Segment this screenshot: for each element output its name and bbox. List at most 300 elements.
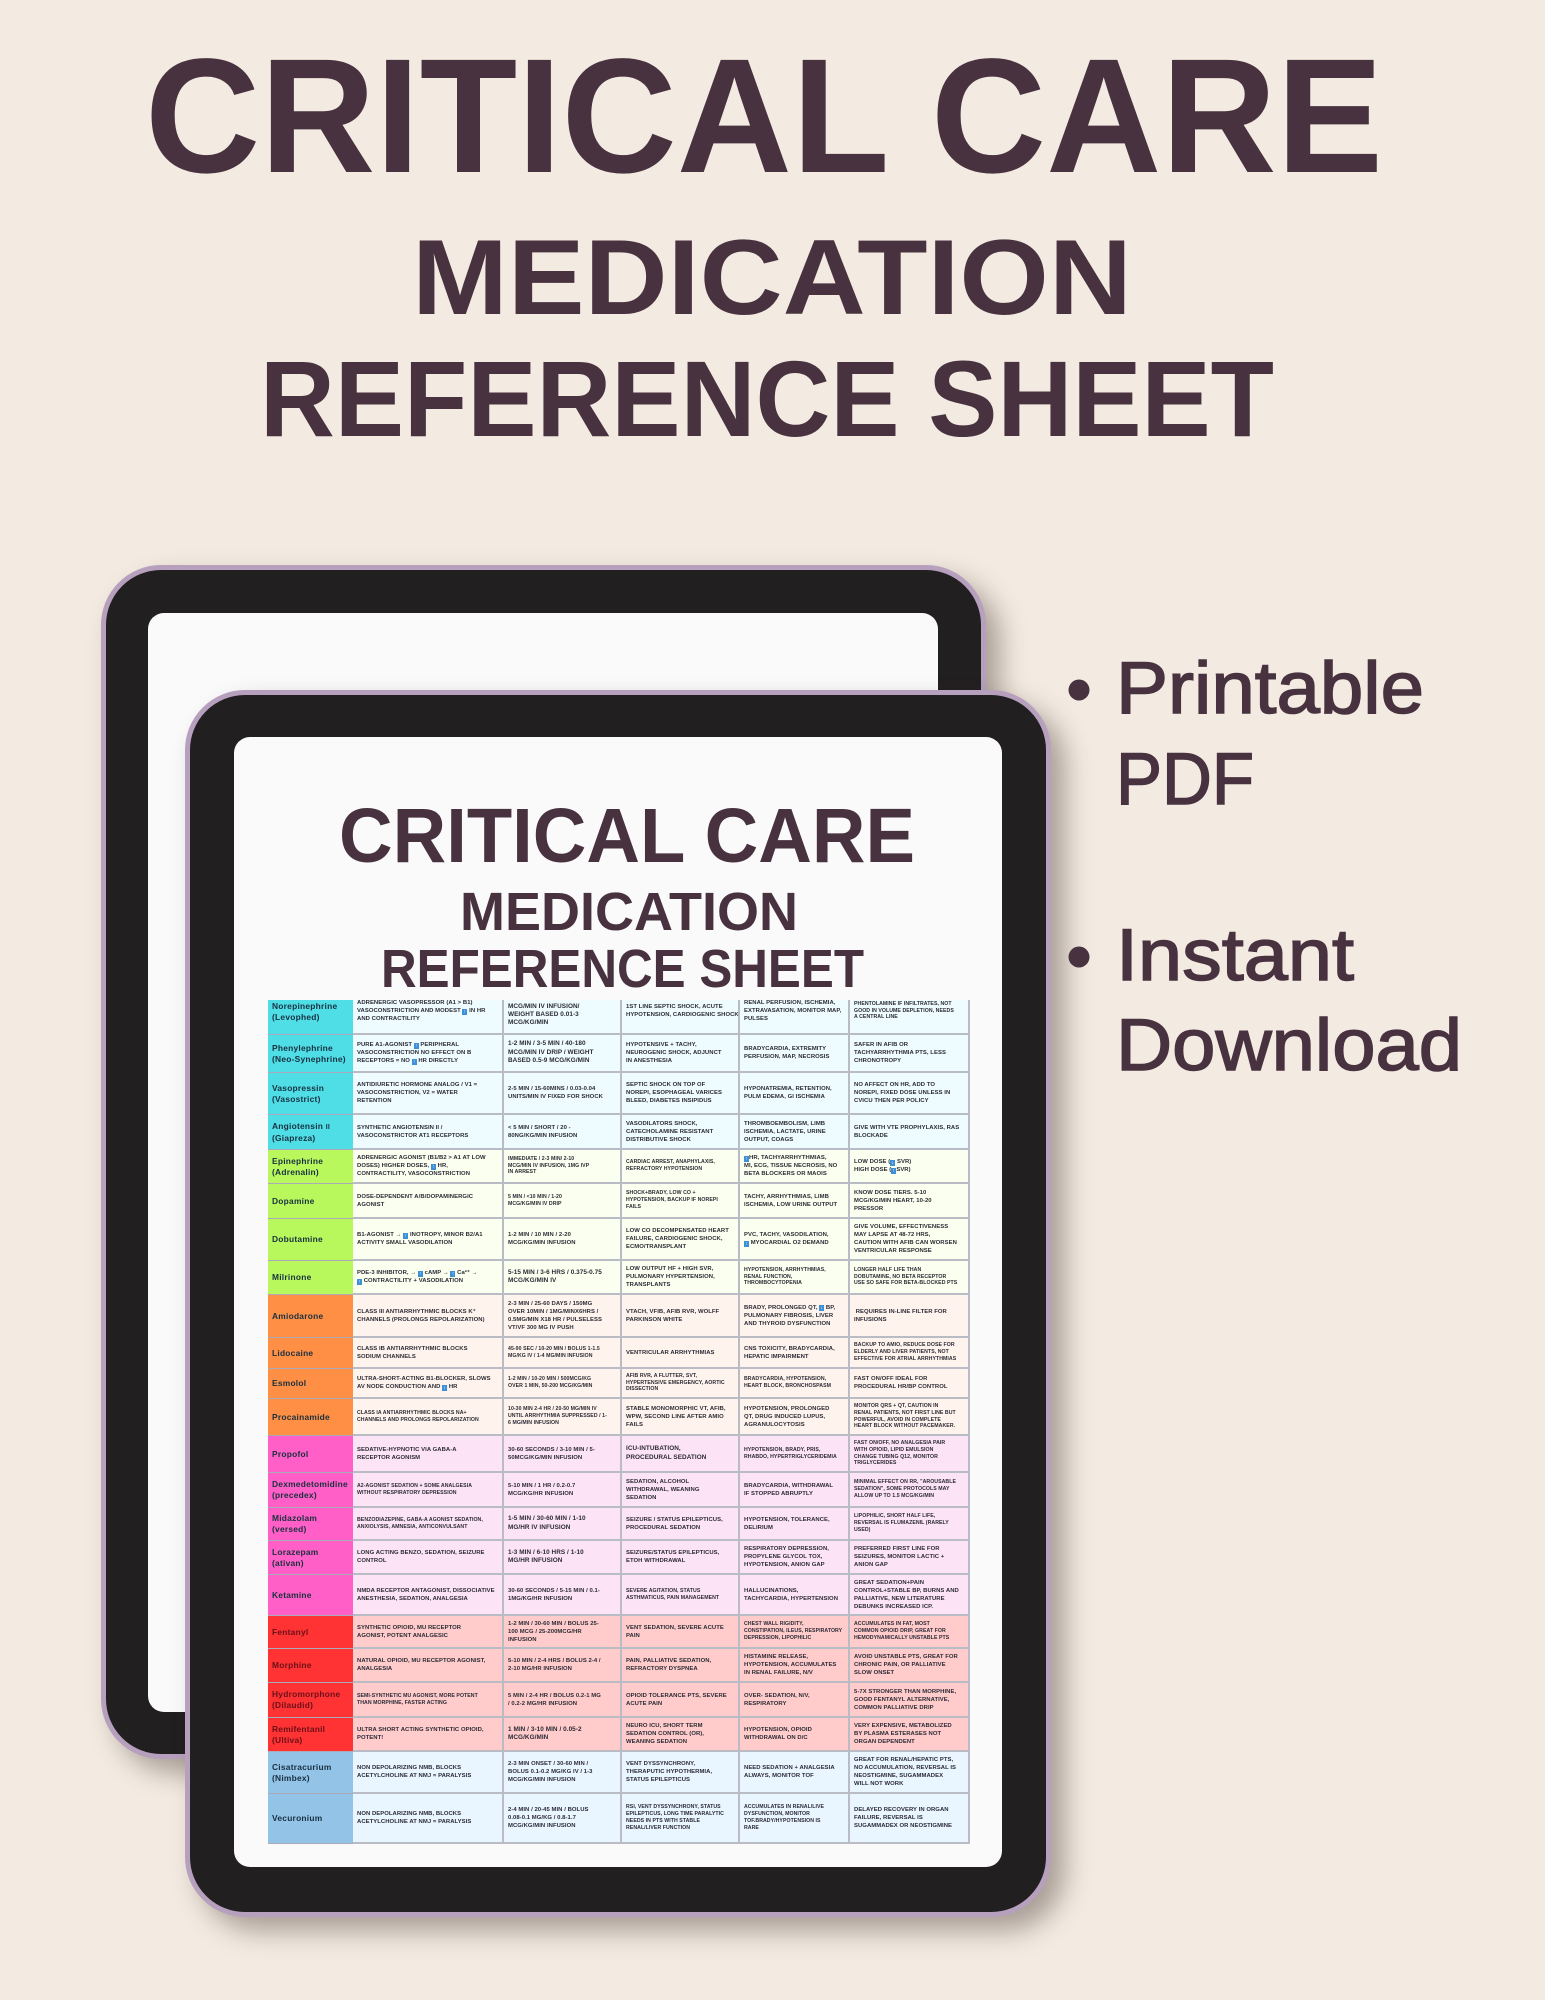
row: Milrinone: MCG/KG/MIN IV bbox=[508, 1277, 556, 1284]
medication table bbox=[268, 1000, 970, 1844]
row: Midazolam: 1-5 MIN / 30-60 MIN / 1-10 bbox=[508, 1515, 586, 1522]
row: Fentanyl: 100 MCG / 25-200MCG/HR bbox=[508, 1628, 582, 1634]
row: Procainamide: 10-30 MIN 2-4 HR / 20-50 MG/MIN IV bbox=[508, 1406, 597, 1412]
row: Midazolam: BENZODIAZEPINE, GABA-A AGONIST SEDATION, bbox=[357, 1517, 483, 1523]
row: Morphine: PAIN, PALLIATIVE SEDATION, bbox=[626, 1658, 711, 1664]
row: Fentanyl: PAIN bbox=[626, 1632, 640, 1638]
row: Epinephrine: CARDIAC ARREST, ANAPHYLAXIS, bbox=[626, 1159, 715, 1165]
row: Remifentanil: WITHDRAWAL ON D/C bbox=[744, 1735, 808, 1741]
row: Angiotensin II bbox=[268, 1115, 970, 1150]
row: Remifentanil: (Ultiva) bbox=[272, 1734, 302, 1744]
row: Vecuronium: FAILURE, REVERSAL IS bbox=[854, 1815, 923, 1821]
row: Procainamide: QT, DRUG INDUCED LUPUS, bbox=[744, 1414, 825, 1420]
row: Esmolol: FAST ON/OFF IDEAL FOR bbox=[854, 1376, 927, 1382]
row: Vasopressin: NOREPI, ESOPHAGEAL VARICES bbox=[626, 1090, 722, 1096]
row: Propofol: TRIGLYCERIDES bbox=[854, 1460, 896, 1466]
row: Dopamine: AGONIST bbox=[357, 1202, 384, 1208]
row: Lorazepam: ETOH WITHDRAWAL bbox=[626, 1558, 685, 1564]
row: Fentanyl: AGONIST, POTENT ANALGESIC bbox=[357, 1632, 448, 1638]
row: Procainamide: AGRANULOCYTOSIS bbox=[744, 1422, 805, 1428]
row: Epinephrine: ↑ bbox=[893, 1168, 895, 1174]
row: Phenylephrine: MCG/MIN IV DRIP / WEIGHT bbox=[508, 1049, 593, 1056]
row: Angiotensin II: OUTPUT, COAGS bbox=[744, 1136, 793, 1142]
row: Phenylephrine: SAFER IN AFIB OR bbox=[854, 1042, 908, 1048]
row: Dopamine: MCG/KG/MIN IV DRIP bbox=[508, 1200, 562, 1206]
row: Ketamine bbox=[268, 1575, 970, 1616]
row: Procainamide: HEART BLOCK WITHOUT PACEMAKER. bbox=[854, 1423, 955, 1429]
row: Procainamide: RENAL PATIENTS, NOT FIRST LINE BUT bbox=[854, 1410, 956, 1416]
row: Phenylephrine: ↑ bbox=[413, 1058, 415, 1064]
row: Dopamine: 5 MIN / <10 MIN / 1-20 bbox=[508, 1194, 562, 1200]
row: Esmolol: AFIB RVR, A FLUTTER, SVT, bbox=[626, 1373, 697, 1379]
row: Vasopressin: 2-5 MIN / 15-60MINS / 0.03-0.04 bbox=[508, 1086, 595, 1092]
row: Dopamine: FAILS bbox=[626, 1204, 641, 1210]
row: Lidocaine: EFFECTIVE FOR ATRIAL ARRHYTHMIAS bbox=[854, 1356, 956, 1362]
row: Dobutamine: Dobutamine bbox=[272, 1234, 323, 1244]
row: Vasopressin: SEPTIC SHOCK ON TOP OF bbox=[626, 1082, 705, 1088]
row: Milrinone: DOBUTAMINE, NO BETA RECEPTOR bbox=[854, 1274, 946, 1280]
row: Lorazepam bbox=[268, 1541, 970, 1575]
row: Esmolol: BRADYCARDIA, HYPOTENSION, bbox=[744, 1376, 826, 1382]
row: Vasopressin: UNITS/MIN IV FIXED FOR SHOCK bbox=[508, 1094, 603, 1100]
sheet heading: Critical Care: CRITICAL CARE bbox=[339, 793, 915, 879]
heading: Medication: MEDICATION bbox=[412, 217, 1132, 337]
row: Dopamine: DOSE-DEPENDENT A/B/DOPAMINERGIC bbox=[357, 1194, 473, 1200]
row: Midazolam: USED) bbox=[854, 1527, 870, 1533]
row: Remifentanil: VERY EXPENSIVE, METABOLIZED bbox=[854, 1723, 952, 1729]
row: Dexmedetomidine: WITHDRAWAL, WEANING bbox=[626, 1486, 699, 1492]
row: Dobutamine: ECMO/TRANSPLANT bbox=[626, 1244, 686, 1250]
row: Cisatracurium: BOLUS 0.1-0.2 MG/KG IV / 1-3 bbox=[508, 1769, 592, 1775]
row: Dopamine: PRESSOR bbox=[854, 1206, 883, 1212]
row: Milrinone: 5-15 MIN / 3-6 HRS / 0.375-0.75 bbox=[508, 1269, 602, 1276]
row: Phenylephrine: 1-2 MIN / 3-5 MIN / 40-180 bbox=[508, 1040, 586, 1047]
row: Amiodarone: REQUIRES IN-LINE FILTER FOR bbox=[856, 1308, 947, 1314]
row: Epinephrine: ADRENERGIC AGONIST (B1/B2 > A1 AT LOW bbox=[357, 1155, 486, 1161]
row: Midazolam: SEIZURE / STATUS EPILEPTICUS, bbox=[626, 1516, 723, 1522]
row: Dopamine: MCG/KG/MIN HEART, 10-20 bbox=[854, 1198, 932, 1204]
row: Ketamine: SEVERE AGITATION, STATUS bbox=[626, 1588, 700, 1594]
row: Midazolam: Midazolam bbox=[272, 1513, 317, 1523]
row: Angiotensin II: SYNTHETIC ANGIOTENSIN II / bbox=[357, 1124, 442, 1130]
row: Vasopressin: NOREPI, FIXED DOSE UNLESS IN bbox=[854, 1090, 950, 1096]
row: Propofol bbox=[268, 1436, 970, 1473]
row: Esmolol: DISSECTION bbox=[626, 1386, 658, 1392]
row: Cisatracurium: THERAPUTIC HYPOTHERMIA, bbox=[626, 1769, 712, 1775]
row: Vecuronium: DELAYED RECOVERY IN ORGAN bbox=[854, 1807, 949, 1813]
row: Angiotensin II: CATECHOLAMINE RESISTANT bbox=[626, 1128, 713, 1134]
row: Midazolam: (versed) bbox=[272, 1524, 307, 1534]
row: Epinephrine bbox=[268, 1150, 970, 1184]
row: Vecuronium: NON DEPOLARIZING NMB, BLOCKS bbox=[357, 1811, 461, 1817]
row: Fentanyl: DEPRESSION, LIPOPHILIC bbox=[744, 1635, 811, 1641]
row: Vasopressin: Vasopressin bbox=[272, 1082, 324, 1092]
row: Angiotensin II: (Giapreza) bbox=[272, 1132, 315, 1142]
row: Remifentanil: WEANING SEDATION bbox=[626, 1739, 687, 1745]
row: Hydromorphone: / 0.2-2 MG/HR INFUSION bbox=[508, 1700, 577, 1706]
row: Morphine: HISTAMINE RELEASE, bbox=[744, 1654, 808, 1660]
row: Lidocaine: CNS TOXICITY, BRADYCARDIA, bbox=[744, 1346, 835, 1352]
row: Norepinephrine: GOOD IN VOLUME DEPLETION, NEEDS bbox=[854, 1008, 954, 1014]
row: Norepinephrine: (Levophed) bbox=[272, 1012, 320, 1022]
row: Fentanyl: VENT SEDATION, SEVERE ACUTE bbox=[626, 1624, 724, 1630]
row: Dobutamine: PVC, TACHY, VASODILATION, bbox=[744, 1232, 829, 1238]
row: Lorazepam: CONTROL bbox=[357, 1558, 387, 1564]
row: Epinephrine: IMMEDIATE / 2-3 MIN/ 2-10 bbox=[508, 1156, 574, 1162]
row: Vasopressin: NO AFFECT ON HR, ADD TO bbox=[854, 1082, 935, 1088]
row: Propofol: HYPOTENSION, BRADY, PRIS, bbox=[744, 1447, 820, 1453]
row: Norepinephrine: EXTRAVASATION, MONITOR MAP, bbox=[744, 1008, 841, 1014]
row: Angiotensin II: BLOCKADE bbox=[854, 1132, 888, 1138]
row: Remifentanil: NEURO ICU, SHORT TERM bbox=[626, 1723, 703, 1729]
row: Amiodarone bbox=[268, 1295, 970, 1338]
row: Amiodarone: OVER 10MIN / 1MG/MINX6HRS / bbox=[508, 1308, 598, 1314]
row: Amiodarone: CHANNELS (PROLONGS REPOLARIZATION) bbox=[357, 1316, 485, 1322]
row: Amiodarone: PULMONARY FIBROSIS, LIVER bbox=[744, 1312, 833, 1318]
back tablet screen bbox=[148, 613, 938, 1712]
row: Dobutamine: MYOCARDIAL O2 DEMAND bbox=[751, 1240, 829, 1246]
row: Epinephrine: HIGH DOSE ( SVR) bbox=[854, 1167, 911, 1173]
row: Vasopressin: (Vasostrict) bbox=[272, 1094, 321, 1104]
row: Lorazepam: Lorazepam bbox=[272, 1546, 318, 1556]
row: Vecuronium: DYSFUNCTION, MONITOR bbox=[744, 1811, 810, 1817]
row: Dexmedetomidine: MINIMAL EFFECT ON RR, "AROUSABLE bbox=[854, 1479, 956, 1485]
row: Cisatracurium: VENT DYSSYNCHRONY, bbox=[626, 1761, 695, 1767]
row: Dexmedetomidine: SEDATION, ALCOHOL bbox=[626, 1478, 689, 1484]
row: Procainamide bbox=[268, 1399, 970, 1436]
row: Midazolam: ANXIOLYSIS, AMNESIA, ANTICONVULSANT bbox=[357, 1524, 467, 1530]
row: Fentanyl: HEMODYNAMICALLY UNSTABLE PTS bbox=[854, 1635, 949, 1641]
bullet: Printable PDF: PDF bbox=[1116, 739, 1254, 820]
row: Dobutamine bbox=[268, 1219, 970, 1261]
bullet: Instant Download: Download bbox=[1116, 1005, 1462, 1086]
row: Esmolol bbox=[268, 1369, 970, 1399]
row: Angiotensin II: THROMBOEMBOLISM, LIMB bbox=[744, 1120, 825, 1126]
row: Lidocaine: CLASS IB ANTIARRHYTHMIC BLOCKS bbox=[357, 1346, 468, 1352]
row: Dobutamine: ↑ bbox=[404, 1232, 407, 1238]
row: Phenylephrine: BRADYCARDIA, EXTREMITY bbox=[744, 1046, 826, 1052]
row: Cisatracurium: GREAT FOR RENAL/HEPATIC PTS, bbox=[854, 1757, 953, 1763]
row: Dobutamine: B1-AGONIST → INOTROPY, MINOR B2/A1 bbox=[357, 1232, 483, 1238]
row: Dexmedetomidine: Dexmedetomidine bbox=[272, 1479, 348, 1489]
row: Norepinephrine: VASOCONSTRICTION AND MODEST IN HR bbox=[357, 1008, 485, 1014]
row: Morphine: NATURAL OPIOID, MU RECEPTOR AGONIST, bbox=[357, 1658, 485, 1664]
row: Vecuronium: ACETYLCHOLINE AT NMJ = PARALYSIS bbox=[357, 1819, 471, 1825]
row: Vecuronium: EPILEPTICUS, LONG TIME PARALYTIC bbox=[626, 1811, 724, 1817]
heading: Critical Care: CRITICAL CARE bbox=[145, 24, 1383, 207]
row: Milrinone: THROMBOCYTOPENIA bbox=[744, 1280, 802, 1286]
row: Milrinone bbox=[268, 1261, 970, 1295]
row: Vecuronium: NEEDS IN PTS WITH STABLE bbox=[626, 1818, 700, 1824]
row: Cisatracurium: NEED SEDATION + ANALGESIA bbox=[744, 1765, 835, 1771]
row: Lidocaine: 45-90 SEC / 10-20 MIN / BOLUS 1-1.5 bbox=[508, 1346, 600, 1352]
row: Cisatracurium: STATUS EPILEPTICUS bbox=[626, 1777, 690, 1783]
row: Amiodarone: BRADY, PROLONGED QT, BP, bbox=[744, 1304, 835, 1310]
row: Milrinone: CONTRACTILITY + VASODILATION bbox=[364, 1278, 463, 1284]
row: Propofol: FAST ON/OFF, NO ANALGESIA PAIR bbox=[854, 1440, 945, 1446]
row: Amiodarone: INFUSIONS bbox=[854, 1316, 887, 1322]
row: Epinephrine: ↑ bbox=[745, 1156, 748, 1162]
row: Lorazepam: PROPYLENE GLYCOL TOX, bbox=[744, 1554, 822, 1560]
row: Lidocaine bbox=[268, 1338, 970, 1369]
row: Esmolol: OVER 1 MIN, 50-200 MCG/KG/MIN bbox=[508, 1383, 592, 1389]
row: Dopamine: SHOCK+BRADY, LOW CO + bbox=[626, 1190, 696, 1196]
row: Phenylephrine: HYPOTENSIVE + TACHY, bbox=[626, 1042, 697, 1048]
row: Dexmedetomidine: WITHOUT RESPIRATORY DEPRESSION bbox=[357, 1490, 457, 1496]
heading: Reference Sheet: REFERENCE SHEET bbox=[260, 338, 1274, 459]
row: Vecuronium: Vecuronium bbox=[272, 1813, 322, 1823]
row: Vecuronium: RSI, VENT DYSSYNCHRONY, STATUS bbox=[626, 1804, 721, 1810]
row: Procainamide: FAILS bbox=[626, 1422, 643, 1428]
row: Propofol: WITH OPIOID, LIPID EMULSION bbox=[854, 1447, 933, 1453]
row: Cisatracurium bbox=[268, 1752, 970, 1794]
row: Esmolol: AV NODE CONDUCTION AND HR bbox=[357, 1384, 458, 1390]
row: Dobutamine: VENTRICULAR RESPONSE bbox=[854, 1248, 932, 1254]
row: Lorazepam: 1-3 MIN / 6-10 HRS / 1-10 bbox=[508, 1549, 584, 1556]
row: Epinephrine: MCG/MIN IV INFUSION, 1MG IVP bbox=[508, 1163, 589, 1169]
row: Dopamine: ISCHEMIA, LOW URINE OUTPUT bbox=[744, 1202, 837, 1208]
row: Lidocaine: BACKUP TO AMIO, REDUCE DOSE FOR bbox=[854, 1342, 955, 1348]
row: Amiodarone: Amiodarone bbox=[272, 1310, 323, 1320]
row: Fentanyl bbox=[268, 1616, 970, 1649]
row: Remifentanil: BY PLASMA ESTERASES NOT bbox=[854, 1731, 941, 1737]
row: Dobutamine: FAILURE, CARDIOGENIC SHOCK, bbox=[626, 1236, 723, 1242]
row: Phenylephrine: TACHYARRHYTHMIA PTS, LESS bbox=[854, 1050, 946, 1056]
row: Propofol: RHABDO, HYPERTRIGLYCERIDEMIA bbox=[744, 1454, 837, 1460]
row: Hydromorphone: OVER- SEDATION, N/V, bbox=[744, 1692, 810, 1698]
row: Fentanyl: CHEST WALL RIGIDITY, bbox=[744, 1621, 804, 1627]
row: Epinephrine: Epinephrine bbox=[272, 1156, 323, 1166]
row: Milrinone: ↑ bbox=[452, 1270, 454, 1276]
row: Morphine: CHRONIC PAIN, OR PALLIATIVE bbox=[854, 1662, 946, 1668]
row: Vasopressin: CVICU THEN PER POLICY bbox=[854, 1098, 929, 1104]
row: Procainamide: CLASS IA ANTIARRHYTHMIC BLOCKS NA+ bbox=[357, 1410, 467, 1416]
row: Epinephrine: ↓ bbox=[892, 1160, 894, 1166]
row: Milrinone: Milrinone bbox=[272, 1272, 311, 1282]
row: Norepinephrine bbox=[268, 1000, 970, 1844]
row: Epinephrine: LOW DOSE ( SVR) bbox=[854, 1159, 911, 1165]
row: Morphine: SLOW ONSET bbox=[854, 1670, 894, 1676]
row: Phenylephrine bbox=[268, 1035, 970, 1073]
row: Morphine bbox=[268, 1649, 970, 1683]
row: Dexmedetomidine: SEDATION", SOME PROTOCOLS MAY bbox=[854, 1486, 949, 1492]
row: Norepinephrine: Norepinephrine bbox=[272, 1000, 337, 1010]
row: Norepinephrine: A CENTRAL LINE bbox=[854, 1014, 898, 1020]
row: Vecuronium: MCG/KG/MIN INFUSION bbox=[508, 1823, 576, 1829]
row: Milrinone: PULMONARY HYPERTENSION, bbox=[626, 1274, 715, 1280]
row: Angiotensin II: VASOCONSTRICTOR AT1 RECEPTORS bbox=[357, 1132, 468, 1138]
row: Procainamide: STABLE MONOMORPHIC VT, AFIB, bbox=[626, 1406, 726, 1412]
row: Vecuronium: SUGAMMADEX OR NEOSTIGMINE bbox=[854, 1823, 952, 1829]
row: Angiotensin II: ISCHEMIA, LACTATE, URINE bbox=[744, 1128, 826, 1134]
row: Esmolol: ULTRA-SHORT-ACTING B1-BLOCKER, SLOWS bbox=[357, 1376, 491, 1382]
row: Amiodarone: VT/VF 300 MG IV PUSH bbox=[508, 1324, 574, 1330]
row: Epinephrine: ↑ bbox=[432, 1164, 435, 1170]
row: Milrinone: USE SO SAFE FOR BETA-BLOCKED PTS bbox=[854, 1280, 957, 1286]
row: Dobutamine: GIVE VOLUME, EFFECTIVENESS bbox=[854, 1224, 948, 1230]
row: Dobutamine: LOW CO DECOMPENSATED HEART bbox=[626, 1228, 729, 1234]
row: Milrinone: HYPOTENSION, ARRHYTHMIAS, bbox=[744, 1267, 826, 1273]
row: Vecuronium: ACCUMULATES IN RENAL/LIVE bbox=[744, 1804, 824, 1810]
row: Norepinephrine: HYPOTENSION, CARDIOGENIC SHOCK bbox=[626, 1012, 739, 1018]
row: Esmolol: 1-2 MIN / 10-20 MIN / 500MCG/KG bbox=[508, 1376, 591, 1382]
row: Hydromorphone: COMMON PALLIATIVE DRIP bbox=[854, 1704, 934, 1710]
row: Procainamide: Procainamide bbox=[272, 1412, 330, 1422]
row: Propofol: RECEPTOR AGONISM bbox=[357, 1454, 420, 1460]
row: Milrinone: ↑ bbox=[358, 1278, 361, 1284]
row: Angiotensin II: DISTRIBUTIVE SHOCK bbox=[626, 1136, 691, 1142]
row: Lidocaine: VENTRICULAR ARRHYTHMIAS bbox=[626, 1350, 715, 1356]
row: Dobutamine: CAUTION WITH AFIB CAN WORSEN bbox=[854, 1240, 957, 1246]
row: Phenylephrine: ↑ bbox=[415, 1042, 418, 1048]
row: Cisatracurium: NO ACCUMULATION, REVERSAL IS bbox=[854, 1765, 956, 1771]
row: Remifentanil: 1 MIN / 3-10 MIN / 0.05-2 bbox=[508, 1726, 582, 1733]
row: Vasopressin: BLEED, DIABETES INSIPIDUS bbox=[626, 1098, 712, 1104]
row: Fentanyl: SYNTHETIC OPIOID, MU RECEPTOR bbox=[357, 1624, 461, 1630]
row: Lidocaine: Lidocaine bbox=[272, 1348, 313, 1358]
row: Cisatracurium: (Nimbex) bbox=[272, 1772, 310, 1782]
row: Ketamine: PALLIATIVE, NEW LITERATURE bbox=[854, 1596, 945, 1602]
row: Vasopressin: PULM EDEMA, GI ISCHEMIA bbox=[744, 1094, 825, 1100]
row: Amiodarone: VTACH, VFIB, AFIB RVR, WOLFF bbox=[626, 1308, 719, 1314]
row: Lorazepam: SEIZURES, MONITOR LACTIC + bbox=[854, 1554, 944, 1560]
row: Propofol: SEDATIVE-HYPNOTIC VIA GABA-A bbox=[357, 1446, 457, 1452]
row: Dopamine: KNOW DOSE TIERS. 5-10 bbox=[854, 1190, 926, 1196]
row: Ketamine: ASTHMATICUS, PAIN MANAGEMENT bbox=[626, 1594, 719, 1600]
row: Dobutamine: ↑ bbox=[745, 1240, 748, 1246]
row: Amiodarone: 2-3 MIN / 25-60 DAYS / 150MG bbox=[508, 1300, 592, 1306]
row: Dexmedetomidine: (precedex) bbox=[272, 1490, 317, 1500]
row: Fentanyl: COMMON OPIOID DRIP, GREAT FOR bbox=[854, 1628, 946, 1634]
row: Milrinone: RENAL FUNCTION, bbox=[744, 1274, 792, 1280]
row: Dobutamine: MCG/KG/MIN INFUSION bbox=[508, 1240, 576, 1246]
row: Dobutamine: 1-2 MIN / 10 MIN / 2-20 bbox=[508, 1232, 571, 1238]
row: Remifentanil: ORGAN DEPENDENT bbox=[854, 1739, 915, 1745]
row: Amiodarone: AND THYROID DYSFUNCTION bbox=[744, 1320, 830, 1326]
row: Angiotensin II: GIVE WITH VTE PROPHYLAXIS, RAS bbox=[854, 1124, 959, 1130]
row: Propofol: PROCEDURAL SEDATION bbox=[626, 1454, 706, 1460]
row: Ketamine: DEBUNKS INCREASED ICP. bbox=[854, 1604, 933, 1610]
row: Amiodarone: PARKINSON WHITE bbox=[626, 1316, 682, 1322]
row: Milrinone: TRANSPLANTS bbox=[626, 1282, 671, 1288]
front tablet screen bbox=[234, 737, 1002, 1867]
row: Lidocaine: MG/KG IV / 1-4 MG/MIN INFUSION bbox=[508, 1352, 593, 1358]
row: Lorazepam: ANION GAP bbox=[854, 1562, 888, 1568]
row: Esmolol: PROCEDURAL HR/BP CONTROL bbox=[854, 1384, 948, 1390]
row: Propofol: Propofol bbox=[272, 1448, 308, 1458]
row: Procainamide: 6 MG/MIN INFUSION bbox=[508, 1420, 559, 1426]
row: Milrinone: LOW OUTPUT HF + HIGH SVR, bbox=[626, 1266, 713, 1272]
row: Phenylephrine: PURE A1-AGONIST PERIPHERAL bbox=[357, 1042, 459, 1048]
front tablet bbox=[185, 690, 1051, 1917]
row: Midazolam: MG/HR IV INFUSION bbox=[508, 1524, 570, 1530]
row: Remifentanil bbox=[268, 1718, 970, 1752]
row: Milrinone: PDE-3 INHIBITOR, → cAMP → Ca²⁺ → bbox=[357, 1270, 478, 1276]
row: Hydromorphone: Hydromorphone bbox=[272, 1689, 340, 1699]
row: Phenylephrine: IN ANESTHESIA bbox=[626, 1058, 672, 1064]
row: Dopamine bbox=[268, 1184, 970, 1219]
row: Hydromorphone: 5 MIN / 2-4 HR / BOLUS 0.2-1 MG bbox=[508, 1692, 601, 1698]
row: Epinephrine: MI, ECG, TISSUE NECROSIS, NO bbox=[744, 1163, 837, 1169]
row: Fentanyl: ACCUMULATES IN FAT, MOST bbox=[854, 1621, 930, 1627]
row: Remifentanil: SEDATION CONTROL (OR), bbox=[626, 1731, 704, 1737]
row: Vasopressin: HYPONATREMIA, RETENTION, bbox=[744, 1086, 832, 1092]
row: Norepinephrine: 1ST LINE SEPTIC SHOCK, ACUTE bbox=[626, 1004, 723, 1010]
bullet: Printable PDF bbox=[1068, 648, 1424, 820]
row: Morphine: AVOID UNSTABLE PTS, GREAT FOR bbox=[854, 1654, 958, 1660]
row: Dexmedetomidine: MCG/KG/HR INFUSION bbox=[508, 1490, 573, 1496]
row: Phenylephrine: PERFUSION, MAP, NECROSIS bbox=[744, 1054, 829, 1060]
row: Propofol: ICU-INTUBATION, bbox=[626, 1445, 681, 1452]
row: Angiotensin II: 80NG/KG/MIN INFUSION bbox=[508, 1132, 577, 1138]
row: Morphine: REFRACTORY DYSPNEA bbox=[626, 1666, 698, 1672]
row: Milrinone: LONGER HALF LIFE THAN bbox=[854, 1267, 921, 1273]
row: Ketamine: ANESTHESIA, SEDATION, ANALGESIA bbox=[357, 1596, 468, 1602]
row: Epinephrine: HR, TACHYARRHYTHMIAS, bbox=[749, 1155, 827, 1161]
row: Cisatracurium: 2-3 MIN ONSET / 30-60 MIN / bbox=[508, 1761, 588, 1767]
row: Vecuronium: 0.08-0.1 MG/KG / 0.8-1.7 bbox=[508, 1815, 576, 1821]
row: Cisatracurium: NON DEPOLARIZING NMB, BLOCKS bbox=[357, 1765, 461, 1771]
row: Lidocaine: SODIUM CHANNELS bbox=[357, 1354, 416, 1360]
row: Esmolol: Esmolol bbox=[272, 1378, 306, 1388]
row: Remifentanil: HYPOTENSION, OPIOID bbox=[744, 1727, 812, 1733]
row: Morphine: IN RENAL FAILURE, N/V bbox=[744, 1670, 813, 1676]
bullet: Instant Download: Instant bbox=[1116, 915, 1354, 996]
row: Morphine: HYPOTENSION, ACCUMULATES bbox=[744, 1662, 836, 1668]
row: Cisatracurium: NEOSTIGMINE, SUGAMMADEX bbox=[854, 1773, 943, 1779]
row: Phenylephrine: BASED 0.5-9 MCG/KG/MIN bbox=[508, 1057, 590, 1064]
row: Vecuronium: TOF.BRADY/HYPOTENSION IS bbox=[744, 1818, 821, 1824]
row: Midazolam: DELIRIUM bbox=[744, 1524, 773, 1530]
bullet: Printable PDF: Printable bbox=[1116, 648, 1424, 729]
row: Lorazepam: LONG ACTING BENZO, SEDATION, SEIZURE bbox=[357, 1550, 485, 1556]
row: Vasopressin: ANTIDIURETIC HORMONE ANALOG / V1 = bbox=[357, 1082, 477, 1088]
row: Hydromorphone: 5-7X STRONGER THAN MORPHINE, bbox=[854, 1688, 956, 1694]
row: Norepinephrine: WEIGHT BASED 0.01-3 bbox=[508, 1011, 579, 1018]
row: Remifentanil: MCG/KG/MIN bbox=[508, 1734, 548, 1741]
row: Procainamide: HYPOTENSION, PROLONGED bbox=[744, 1406, 829, 1412]
row: Lorazepam: MG/HR INFUSION bbox=[508, 1557, 562, 1564]
row: Norepinephrine: PHENTOLAMINE IF INFILTRATES, NOT bbox=[854, 1001, 952, 1007]
row: Dexmedetomidine: 5-10 MIN / 1 HR / 0.2-0.7 bbox=[508, 1482, 575, 1488]
row: Esmolol: HEART BLOCK, BRONCHOSPASM bbox=[744, 1383, 831, 1389]
row: Angiotensin II: Angiotensin II bbox=[272, 1120, 330, 1130]
row: Propofol: 30-60 SECONDS / 3-10 MIN / 5- bbox=[508, 1446, 595, 1452]
row: Morphine: 2-10 MG/HR INFUSION bbox=[508, 1666, 572, 1672]
row: Fentanyl: INFUSION bbox=[508, 1636, 537, 1642]
row: Epinephrine: (Adrenalin) bbox=[272, 1166, 319, 1176]
sheet heading: Reference Sheet: REFERENCE SHEET bbox=[381, 939, 864, 999]
row: Lidocaine: ELDERLY AND LIVER PATIENTS, NOT bbox=[854, 1349, 949, 1355]
row: Lidocaine: HEPATIC IMPAIRMENT bbox=[744, 1354, 809, 1360]
row: Lorazepam: HYPOTENSION, ANION GAP bbox=[744, 1562, 825, 1568]
row: Amiodarone: ↓ bbox=[820, 1305, 823, 1311]
row: Phenylephrine: RECEPTORS = NO HR DIRECTLY bbox=[357, 1058, 458, 1064]
row: Hydromorphone: THAN MORPHINE, FASTER ACTING bbox=[357, 1700, 447, 1706]
row: Fentanyl: Fentanyl bbox=[272, 1626, 308, 1636]
row: Ketamine: TACHYCARDIA, HYPERTENSION bbox=[744, 1596, 838, 1602]
row: Dopamine: HYPOTENSION, BACKUP IF NOREPI bbox=[626, 1197, 718, 1203]
row: Cisatracurium: ACETYLCHOLINE AT NMJ = PARALYSIS bbox=[357, 1773, 471, 1779]
row: Norepinephrine: RENAL PERFUSION, ISCHEMIA, bbox=[744, 1000, 835, 1006]
row: Epinephrine: CONTRACTILITY, VASOCONSTRICTION bbox=[357, 1171, 470, 1177]
row: Norepinephrine: AND CONTRACTILITY bbox=[357, 1016, 420, 1022]
row: Cisatracurium: WILL NOT WORK bbox=[854, 1781, 903, 1787]
row: Dexmedetomidine: IF STOPPED ABRUPTLY bbox=[744, 1490, 813, 1496]
row: Fentanyl: 1-2 MIN / 30-60 MIN / BOLUS 25- bbox=[508, 1620, 599, 1626]
row: Lorazepam: PREFERRED FIRST LINE FOR bbox=[854, 1546, 940, 1552]
row: Midazolam: HYPOTENSION, TOLERANCE, bbox=[744, 1516, 830, 1522]
